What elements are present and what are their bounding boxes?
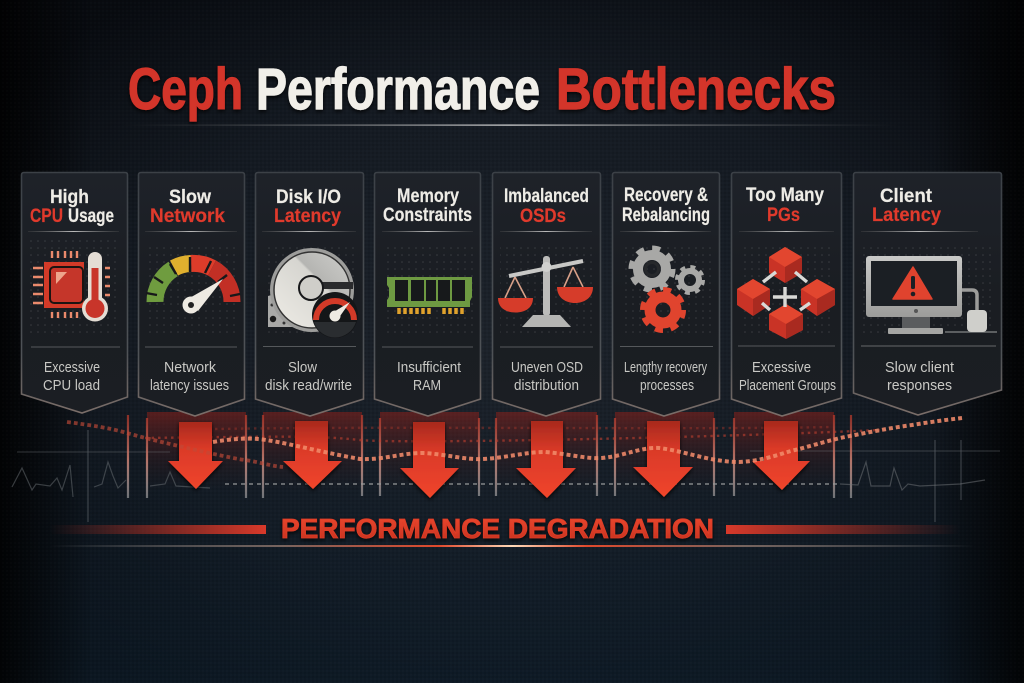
panel: Disk I/O Latency	[256, 172, 364, 416]
title underline	[120, 124, 900, 126]
panel: Disk I/O Latency: Disk I/O	[276, 187, 341, 208]
panel: Too Many PGs	[732, 172, 842, 416]
title: Performance	[256, 57, 540, 122]
title: Ceph	[128, 57, 243, 122]
panel: Imbalanced OSDs: distribution	[514, 377, 579, 394]
title: Bottlenecks	[556, 57, 836, 122]
panel: High CPU Usage	[22, 172, 128, 413]
panel: Memory Constraints: Memory	[397, 186, 459, 207]
dashed baseline	[225, 483, 840, 485]
right bar	[726, 525, 960, 534]
panel: Recovery & Rebalancing: processes	[640, 377, 694, 394]
panel: Recovery & Rebalancing: Rebalancing	[622, 205, 710, 226]
icon: speed gauge	[146, 257, 240, 314]
performance degradation chart	[12, 412, 1000, 522]
panel: Disk I/O Latency: Latency	[274, 206, 341, 227]
dotted degradation curve	[67, 422, 283, 467]
panel: Memory Constraints	[374, 172, 480, 416]
panel: Recovery & Rebalancing	[612, 172, 720, 416]
panel: High CPU Usage: CPU load	[43, 377, 100, 394]
panel: High CPU Usage: High	[50, 187, 89, 208]
panel: Slow Network: Network	[164, 359, 216, 376]
ECG trace left	[12, 462, 210, 497]
panel: Too Many PGs: PGs	[767, 205, 800, 226]
panel: Client Latency: Client	[880, 186, 933, 207]
panel: Slow Network	[138, 172, 244, 416]
vertical spikes	[128, 415, 851, 498]
panel: Memory Constraints: Constraints	[383, 205, 472, 226]
panel: Disk I/O Latency: Slow	[288, 359, 317, 376]
banner: performance degradation	[50, 513, 975, 547]
icon: RAM module	[387, 277, 472, 314]
arrows	[168, 421, 810, 498]
panel: Imbalanced OSDs: Uneven OSD	[511, 359, 583, 376]
panel: Too Many PGs: Too Many	[746, 185, 824, 206]
glowing underline	[50, 545, 975, 547]
panel: Slow Network: Slow	[169, 187, 211, 208]
panel: Slow Network: latency issues	[150, 377, 229, 394]
panel: Too Many PGs: Placement Groups	[739, 377, 836, 394]
panel: Client Latency	[854, 172, 1002, 415]
panel: Recovery & Rebalancing: Lengthy recovery	[624, 359, 707, 376]
panel: Too Many PGs: Excessive	[752, 359, 811, 376]
red haze columns behind arrows	[147, 412, 834, 492]
panel: Disk I/O Latency: disk read/write	[265, 377, 352, 394]
icon: connected cubes	[737, 247, 835, 339]
left bar	[50, 525, 266, 534]
icon: balance scale	[498, 256, 593, 327]
icon: CPU with thermometer	[33, 251, 110, 322]
icon: hard disk with gauge	[268, 248, 358, 338]
panel: Slow Network: Network	[150, 206, 225, 227]
icon: monitor with warning	[866, 256, 997, 334]
panel: Recovery & Rebalancing: Recovery &	[624, 185, 708, 206]
panel: Imbalanced OSDs: Imbalanced	[504, 186, 589, 207]
faint baseline lines	[17, 451, 1000, 452]
ECG trace right	[840, 462, 985, 490]
upper dotted traces	[145, 430, 880, 441]
panel: Client Latency: responses	[887, 377, 952, 394]
title	[128, 57, 836, 122]
panel: Memory Constraints: Insufficient	[397, 359, 462, 376]
panel: High CPU Usage: CPU	[30, 206, 63, 227]
panel: High CPU Usage: Usage	[68, 206, 114, 227]
panel: High CPU Usage: Excessive	[44, 359, 100, 376]
panel: Client Latency: Latency	[872, 205, 941, 226]
panel: Imbalanced OSDs: OSDs	[520, 206, 566, 227]
panel: Imbalanced OSDs	[492, 172, 600, 416]
icon: gears	[632, 248, 703, 330]
panel: Memory Constraints: RAM	[413, 377, 441, 394]
panel: Client Latency: Slow client	[885, 359, 955, 376]
banner text: PERFORMANCE DEGRADATION	[281, 513, 714, 544]
